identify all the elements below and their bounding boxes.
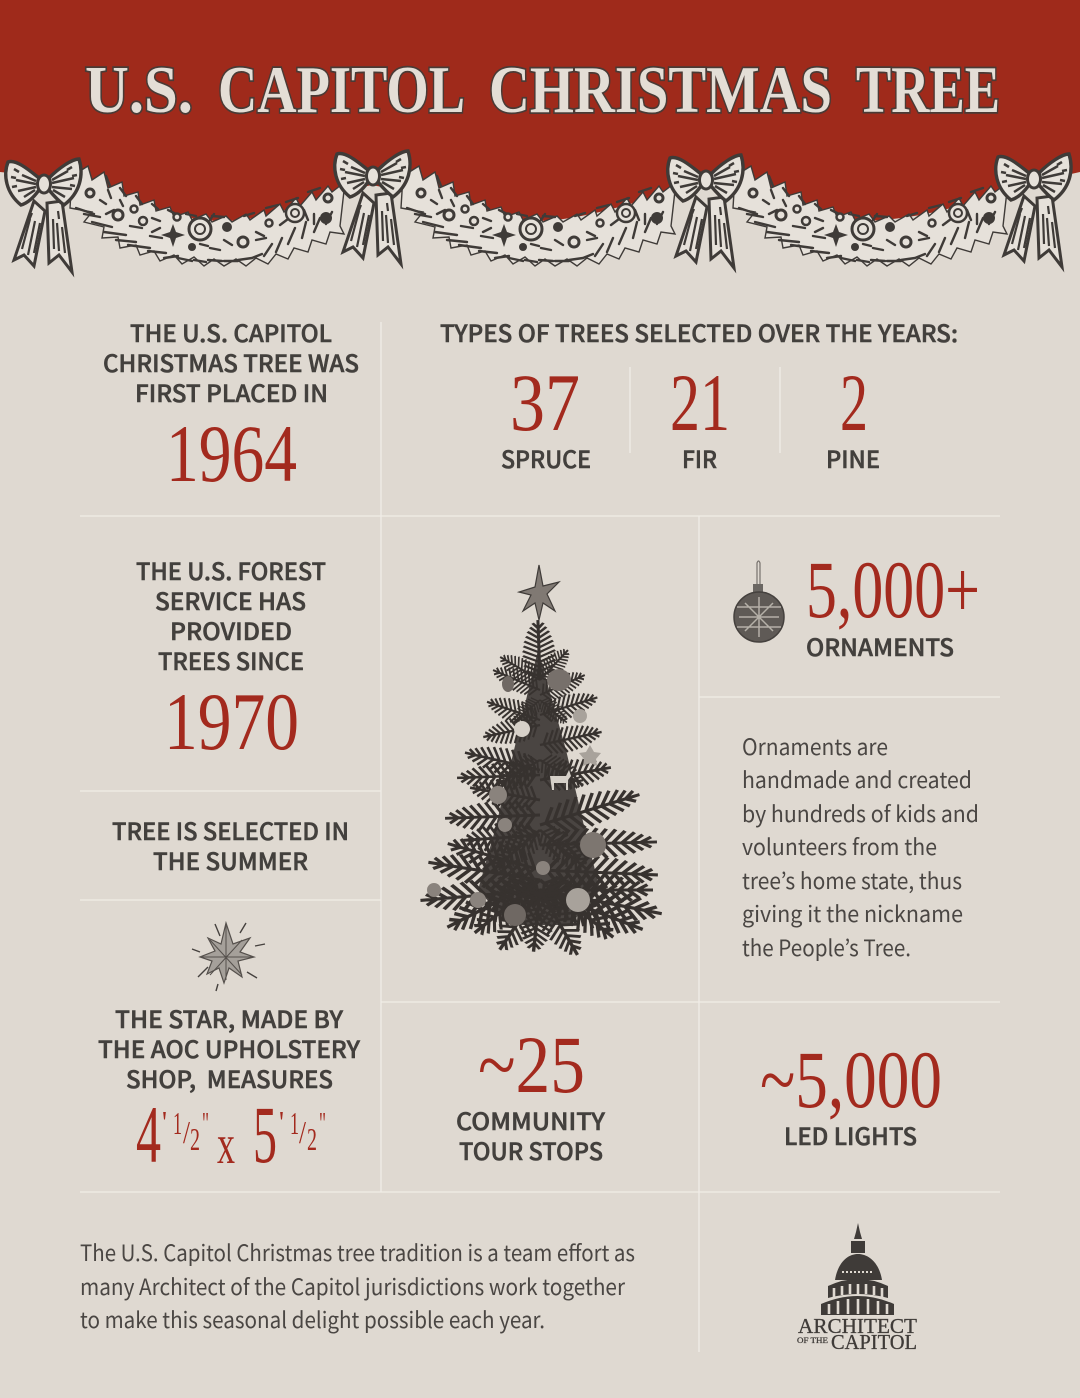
panel: forest service 1970: TREES SINCE [158,643,304,677]
stat: community tour stops: COMMUNITY [456,1103,606,1137]
panel: star measurement: SHOP, MEASURES [126,1061,333,1095]
illustration: decorated Christmas tree [419,565,665,964]
title: CAPITOL [218,53,465,127]
logo: Architect of the Capitol [797,1223,917,1354]
text block: footer note: The U.S. Capitol Christmas tree tradition is a team effort as [80,1236,635,1268]
logo: Architect of the Capitol: OF THE [797,1335,828,1345]
panel: types of trees: 2 [840,357,868,448]
panel: star measurement: " [319,1105,326,1141]
stat: ornaments count: 5,000+ [806,544,980,635]
title [85,53,1000,127]
stat: community tour stops: ~25 [478,1019,585,1110]
panel: types of trees: TYPES OF TREES SELECTED OVER THE YEARS: [440,315,958,349]
title: U.S. [85,53,193,127]
panel: star measurement: ' [279,1104,284,1140]
panel: selected in summer: TREE IS SELECTED IN [112,813,349,847]
panel: star measurement: 1 [173,1105,182,1141]
text block: ornaments description: volunteers from the [742,830,937,862]
stat: ornaments count: ORNAMENTS [806,629,954,663]
panel: star measurement: 5 [253,1089,277,1180]
panel: star measurement: 2 [307,1121,317,1157]
panel: star measurement: THE STAR, MADE BY [115,1001,344,1035]
panel: types of trees: SPRUCE [501,441,591,475]
garland with bows [6,151,1071,272]
text block: ornaments description: the People’s Tree. [742,931,911,963]
panel: forest service 1970 [136,553,326,767]
panel: forest service 1970: SERVICE HAS [155,583,306,617]
panel: types of trees [440,315,958,475]
panel: star measurement: THE AOC UPHOLSTERY [98,1031,361,1065]
text block: ornaments description: by hundreds of kids and [742,797,979,829]
text block: ornaments description: handmade and created [742,763,972,795]
icon: ornament [734,561,784,642]
panel: star measurement: / [183,1114,190,1150]
stat: LED lights: ~5,000 [760,1034,942,1125]
panel: star measurement: " [202,1105,209,1141]
stat: LED lights [760,1034,942,1152]
logo: Architect of the Capitol: CAPITOL [831,1330,917,1354]
panel: types of trees: PINE [826,441,880,475]
panel: first placed 1964: 1964 [166,408,297,499]
title: TREE [856,53,1000,127]
text block: footer note: many Architect of the Capitol jurisdictions work together [80,1270,625,1302]
text block: ornaments description: tree’s home state, thus [742,864,962,896]
panel: forest service 1970: THE U.S. FOREST [136,553,326,587]
text block: ornaments description: Ornaments are [742,730,888,762]
panel: star measurement: 1 [290,1105,299,1141]
panel: types of trees: 37 [510,357,580,448]
panel: first placed 1964: FIRST PLACED IN [135,375,328,409]
title: CHRISTMAS [489,53,832,127]
panel: types of trees: 21 [670,357,730,448]
panel: star measurement [98,1001,361,1180]
panel: first placed 1964: CHRISTMAS TREE WAS [103,345,359,379]
panel: selected in summer [112,813,349,877]
stat: ornaments count [806,544,980,663]
logo: Architect of the Capitol: ARCHITECT [798,1314,917,1338]
panel: star measurement: 4 [136,1089,161,1180]
stat: community tour stops [456,1019,606,1167]
panel: first placed 1964: THE U.S. CAPITOL [130,315,332,349]
panel: types of trees: FIR [682,441,717,475]
text block: footer note [80,1236,635,1335]
red header band [0,0,1080,221]
panel: star measurement: / [299,1114,306,1150]
text block: ornaments description: giving it the nickname [742,897,963,929]
stat: community tour stops: TOUR STOPS [459,1133,603,1167]
panel: forest service 1970: 1970 [164,676,299,767]
text block: ornaments description [742,730,979,963]
panel: first placed 1964 [103,315,359,499]
panel: star measurement: 2 [190,1121,200,1157]
text block: footer note: to make this seasonal delight possible each year. [80,1303,545,1335]
panel: forest service 1970: PROVIDED [170,613,292,647]
panel: star measurement: ' [162,1104,167,1140]
stat: LED lights: LED LIGHTS [784,1118,917,1152]
icon: star [192,923,265,991]
panel: star measurement: x [217,1114,235,1176]
panel: selected in summer: THE SUMMER [153,843,308,877]
